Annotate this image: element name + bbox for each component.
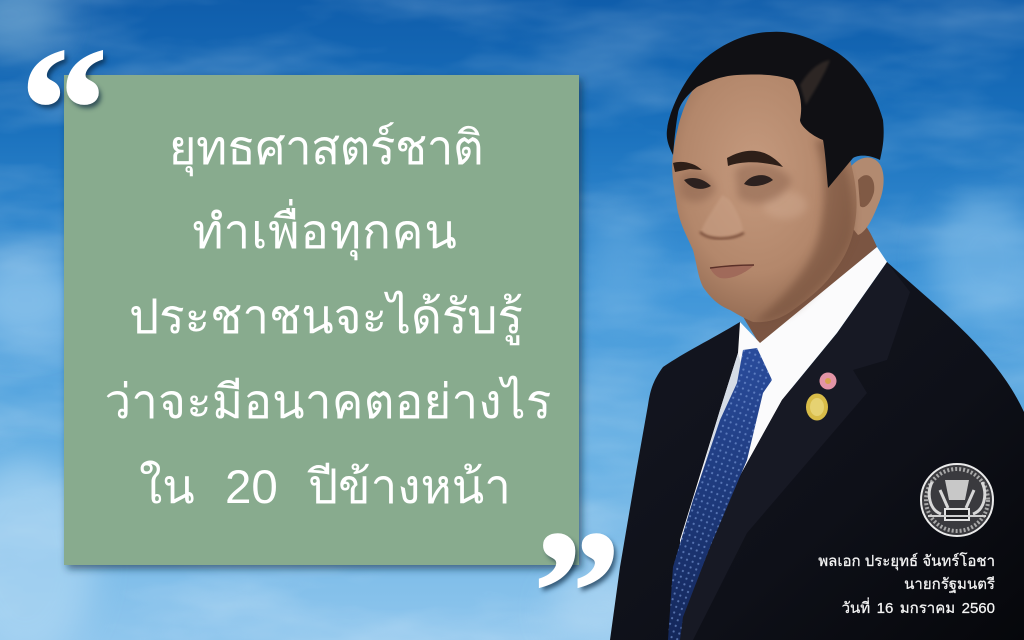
government seal xyxy=(921,464,993,536)
hair xyxy=(667,32,884,188)
caption: name and date: วันที่ 16 มกราคม 2560 xyxy=(842,597,995,617)
suit jacket xyxy=(610,262,1024,640)
shirt collar and front xyxy=(680,247,887,547)
shirt shadow xyxy=(680,353,745,547)
text: “ xyxy=(20,12,108,207)
quote text: ยุทธศาสตร์ชาติ xyxy=(169,122,483,177)
neck xyxy=(742,225,877,345)
eye socket shading xyxy=(680,163,792,203)
cheek highlight xyxy=(763,191,807,219)
face xyxy=(672,60,857,322)
person: portrait of the prime minister xyxy=(610,32,1024,640)
ear xyxy=(846,158,884,235)
quote text: ประชาชนจะได้รับรู้ xyxy=(129,290,523,346)
lapel pins xyxy=(806,372,836,420)
eyes xyxy=(684,175,773,189)
caption: name and date xyxy=(818,552,995,617)
quote text: ทำเพื่อทุกคน xyxy=(192,199,458,261)
necktie xyxy=(668,348,772,640)
quote text xyxy=(104,122,552,514)
quote text: ว่าจะมีอนาคตอย่างไร xyxy=(104,375,552,429)
eyebrows xyxy=(673,151,783,172)
panel: quote box xyxy=(64,75,579,565)
right lapel xyxy=(676,262,910,640)
nose xyxy=(701,195,743,238)
hair highlight xyxy=(800,60,830,105)
caption: name and date: พลเอก ประยุทธ์ จันทร์โอชา xyxy=(818,552,995,571)
caption: name and date: นายกรัฐมนตรี xyxy=(904,576,995,593)
jaw shadow xyxy=(755,140,853,322)
quote text: ใน 20 ปีข้างหน้า xyxy=(139,460,511,514)
mouth xyxy=(710,265,754,278)
